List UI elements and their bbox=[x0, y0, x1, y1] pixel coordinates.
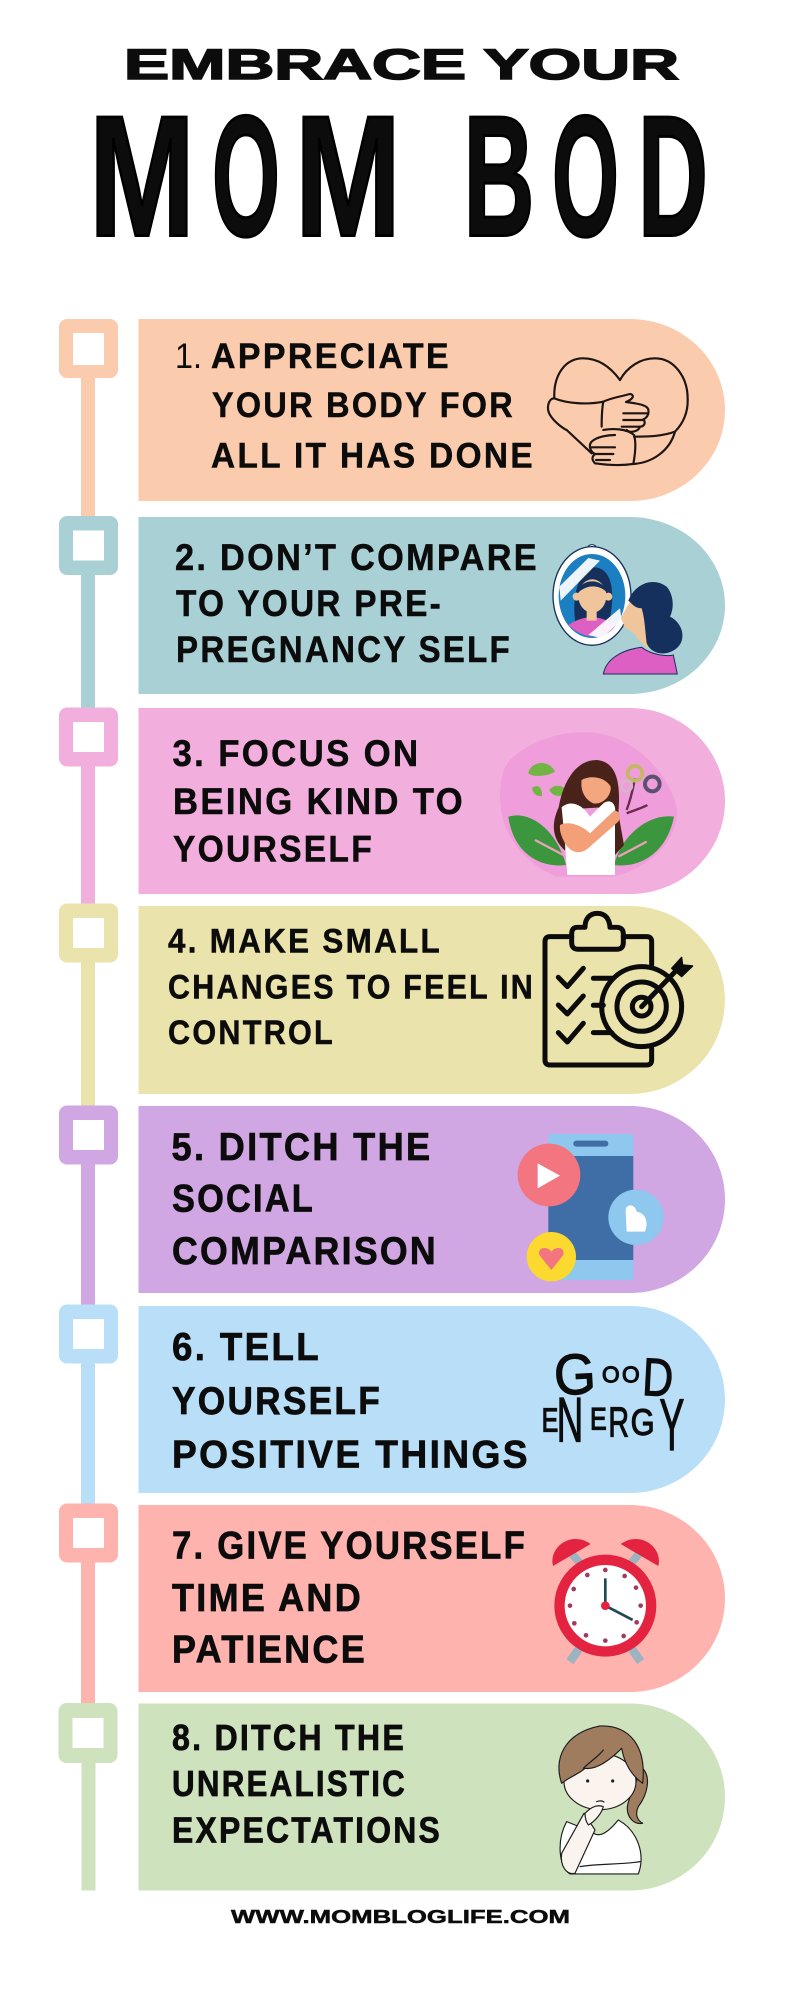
timeline node 8 bbox=[58, 1703, 118, 1763]
panel 1 text bbox=[175, 337, 535, 476]
timeline connector 2 bbox=[81, 570, 95, 712]
panel 8 text: 8. DITCH THE bbox=[172, 1717, 406, 1758]
timeline node 5 bbox=[59, 1106, 118, 1164]
panel 2 text: TO YOUR PRE- bbox=[176, 583, 443, 624]
icon: good energy handwriting: D bbox=[641, 1348, 675, 1408]
icon: clipboard with target bbox=[545, 913, 693, 1065]
icon: good energy handwriting: E bbox=[590, 1400, 607, 1436]
icon: good energy handwriting: Y bbox=[659, 1384, 684, 1466]
panel 7 background bbox=[138, 1505, 725, 1692]
panel 5 text: 5. DITCH THE bbox=[172, 1126, 432, 1169]
panel 8 text: EXPECTATIONS bbox=[172, 1810, 442, 1850]
panel 2 background bbox=[138, 517, 725, 694]
panel 6 text: YOURSELF bbox=[172, 1380, 382, 1423]
icon: good energy handwriting: E bbox=[542, 1403, 558, 1440]
panel 6: tell yourself positive things bbox=[138, 1306, 725, 1493]
title line: Mom Bod: D bbox=[638, 80, 708, 272]
panel 3 background bbox=[138, 708, 725, 894]
timeline bbox=[58, 319, 118, 1890]
panel 6 text bbox=[172, 1326, 530, 1476]
icon: alarm clock bbox=[552, 1539, 659, 1662]
title line: Mom Bod: M bbox=[89, 80, 195, 272]
icon: woman looking in mirror bbox=[553, 545, 682, 674]
timeline connector 4 bbox=[81, 958, 95, 1108]
footer website: WWW.MOMBLOGLIFE.COM bbox=[231, 1906, 570, 1927]
timeline node 4 bbox=[59, 904, 118, 962]
panel 5 background bbox=[138, 1106, 725, 1293]
title line: Embrace Your: EMBRACE YOUR bbox=[124, 41, 679, 89]
panel 3 text: YOURSELF bbox=[173, 828, 374, 870]
panel 4 background bbox=[138, 906, 725, 1094]
title line: Mom Bod: M bbox=[295, 80, 401, 272]
panel 8: ditch unrealistic expectations bbox=[138, 1704, 725, 1890]
panel 6 text: 6. TELL bbox=[172, 1326, 321, 1369]
panel 1 background bbox=[138, 319, 725, 501]
panel 3 text: 3. FOCUS ON bbox=[172, 733, 420, 774]
timeline node 3 bbox=[59, 708, 118, 766]
timeline connector 8 bbox=[82, 1758, 96, 1890]
panel 3 text: BEING KIND TO bbox=[173, 781, 465, 822]
panel 1 text: YOUR BODY FOR bbox=[212, 386, 515, 425]
timeline connector 5 bbox=[81, 1160, 95, 1308]
timeline connector 7 bbox=[81, 1558, 95, 1708]
icon: good energy handwriting: R bbox=[608, 1399, 629, 1446]
panel 7: give yourself time bbox=[138, 1505, 725, 1692]
timeline node 1 bbox=[59, 319, 118, 378]
timeline connector 1 bbox=[81, 370, 95, 520]
panel 5 text: SOCIAL bbox=[172, 1178, 315, 1220]
panel 5 text bbox=[172, 1126, 438, 1273]
panel 6 background bbox=[138, 1306, 725, 1493]
icon: heart hugged by arms bbox=[548, 358, 688, 465]
panel 4 text: CHANGES TO FEEL IN bbox=[168, 968, 535, 1006]
icon: good energy handwriting: G bbox=[552, 1342, 597, 1408]
panel 2: don't compare bbox=[138, 517, 725, 694]
panel 1 text: ALL IT HAS DONE bbox=[211, 436, 535, 476]
title bbox=[89, 41, 708, 272]
panel 8 text: UNREALISTIC bbox=[172, 1763, 407, 1804]
panel 2 text: 2. DON’T COMPARE bbox=[175, 537, 539, 578]
icon: phone with social bubbles bbox=[518, 1134, 664, 1281]
panel 3 text bbox=[172, 733, 465, 870]
panel 1 text: 1. bbox=[175, 337, 202, 376]
panel 8 background bbox=[138, 1704, 725, 1890]
panel 7 text: TIME AND bbox=[172, 1577, 363, 1620]
icon: good energy handwriting bbox=[542, 1342, 684, 1466]
title line: Mom Bod: O bbox=[212, 80, 280, 272]
timeline connector 6 bbox=[81, 1360, 95, 1508]
panel 4: make small changes bbox=[138, 906, 725, 1094]
icon: good energy handwriting: OO bbox=[602, 1362, 640, 1388]
panel 4 text: CONTROL bbox=[168, 1014, 335, 1052]
panel 7 text: 7. GIVE YOURSELF bbox=[172, 1524, 527, 1568]
panel 6 text: POSITIVE THINGS bbox=[172, 1434, 530, 1476]
panel 4 text: 4. MAKE SMALL bbox=[168, 922, 442, 960]
icon: good energy handwriting: G bbox=[631, 1402, 655, 1443]
panel 3: focus on being kind bbox=[138, 708, 725, 894]
panel 4 text bbox=[168, 922, 535, 1052]
timeline connector 3 bbox=[81, 760, 95, 908]
timeline node 7 bbox=[59, 1504, 118, 1562]
timeline node 2 bbox=[59, 516, 118, 575]
panel 2 text bbox=[175, 537, 539, 670]
icon: thinking woman bbox=[559, 1726, 647, 1874]
panel 5: ditch the social comparison bbox=[138, 1106, 725, 1293]
panel 5 text: COMPARISON bbox=[172, 1230, 438, 1273]
panel 7 text bbox=[172, 1524, 527, 1672]
panel 8 text bbox=[172, 1717, 442, 1850]
title line: Mom Bod: O bbox=[552, 80, 619, 272]
panel 1 text: APPRECIATE bbox=[211, 337, 451, 376]
panel 7 text: PATIENCE bbox=[172, 1628, 367, 1672]
panel 2 text: PREGNANCY SELF bbox=[176, 629, 512, 670]
panel 1: appreciate your body bbox=[138, 319, 725, 501]
title line: Mom Bod: B bbox=[464, 80, 534, 272]
icon: good energy handwriting: N bbox=[557, 1386, 583, 1456]
icon: woman hugging herself bbox=[500, 732, 677, 877]
timeline node 6 bbox=[59, 1304, 118, 1364]
